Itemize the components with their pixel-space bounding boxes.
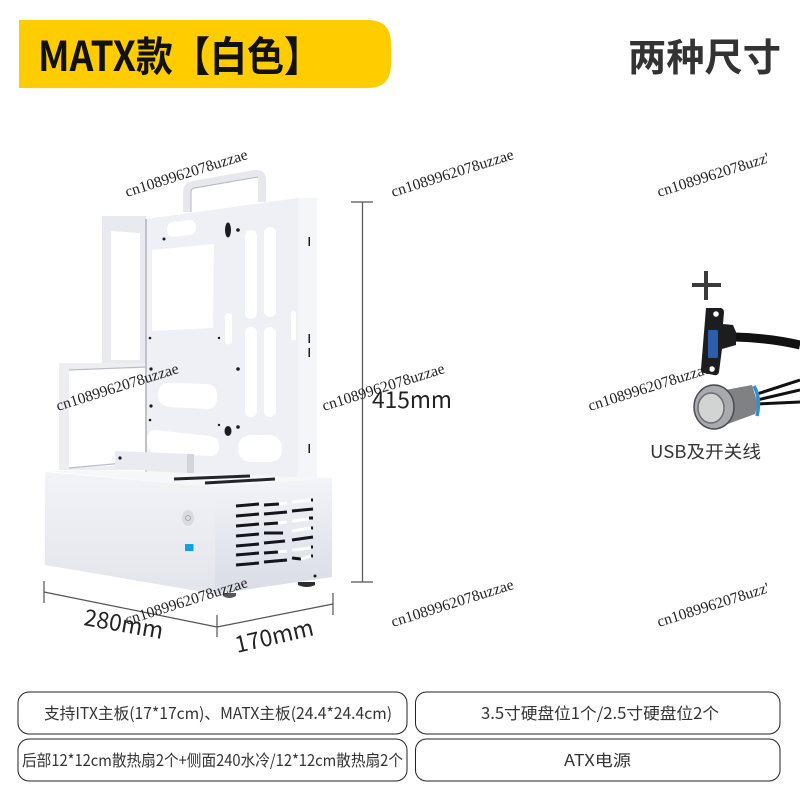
icon: metal power switch with wires xyxy=(694,380,800,429)
watermarks: cn1089962078uzzae xyxy=(389,576,516,631)
dimension: height 415mm xyxy=(351,202,452,582)
dimension: depth 280mm xyxy=(44,581,217,646)
blue indicator xyxy=(185,544,194,551)
icon: USB panel cable xyxy=(701,308,800,375)
watermarks: cn1089962078uzzae xyxy=(389,146,516,201)
spec box: cooling xyxy=(18,739,407,781)
dimension: depth 280mm: 280mm xyxy=(82,598,166,646)
plus sign xyxy=(692,271,721,300)
hard drive bracket xyxy=(115,451,194,474)
dimension: height 415mm: 415mm xyxy=(372,381,452,415)
panel screw holes xyxy=(149,222,310,453)
watermarks xyxy=(54,146,771,631)
base right face xyxy=(215,478,332,594)
dimension: width 170mm xyxy=(217,593,333,660)
spec box: drive bays: 3.5寸硬盘位1个/2.5寸硬盘位2个 xyxy=(481,700,719,724)
back panel xyxy=(146,198,317,480)
vent slots xyxy=(236,500,313,565)
spec box: motherboard support xyxy=(18,692,407,734)
vent white slots xyxy=(278,500,311,559)
spec box: drive bays xyxy=(416,692,780,734)
spec box: motherboard support: 支持ITX主板(17*17cm)、MATX主板(24.4*24.4cm) xyxy=(44,700,392,724)
power button xyxy=(182,510,194,526)
spec box: power supply: ATX电源 xyxy=(564,747,631,771)
white computer case illustration xyxy=(45,174,332,598)
header banner: MATX款【白色】 xyxy=(38,23,321,83)
lower side frame xyxy=(59,363,146,470)
dimension: width 170mm: 170mm xyxy=(231,609,317,660)
watermarks: cn1089962078uzzae xyxy=(54,360,181,415)
watermarks: cn1089962078uzz' xyxy=(655,150,771,201)
spec box: power supply xyxy=(416,739,780,781)
watermarks: cn1089962078uzzae xyxy=(586,360,713,415)
label: USB and switch cable: USB及开关线 xyxy=(650,439,761,464)
spec box: cooling: 后部12*12cm散热扇2个+侧面240水冷/12*12cm散热扇2个 xyxy=(22,747,403,771)
watermarks: cn1089962078uzz' xyxy=(655,580,771,631)
watermarks: cn1089962078uzzae xyxy=(320,360,447,415)
heading: two sizes: 两种尺寸 xyxy=(628,27,781,82)
left side frame xyxy=(102,216,146,364)
panel side flange xyxy=(298,198,317,480)
feet xyxy=(298,582,315,587)
handle xyxy=(187,174,262,212)
base top xyxy=(45,470,332,487)
base left face xyxy=(45,472,215,594)
watermarks: cn1089962078uzzae xyxy=(123,146,250,201)
watermarks: cn1089962078uzzae xyxy=(123,574,250,629)
